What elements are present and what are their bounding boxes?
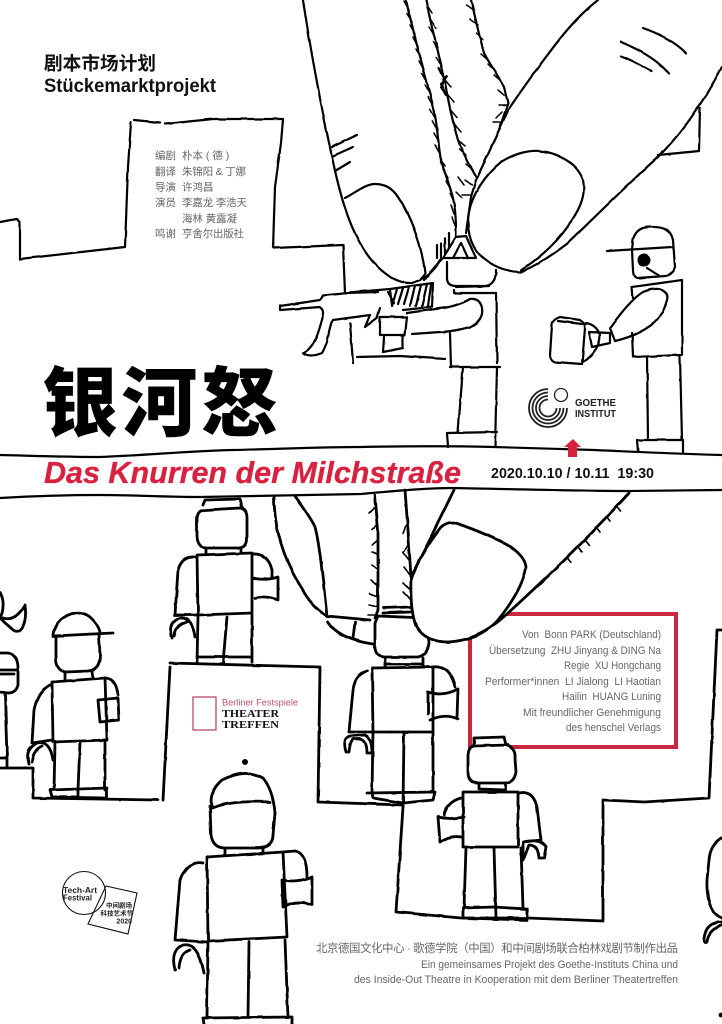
heading: programme name: Stückemarktprojekt [44,76,217,97]
centre figure [345,607,458,807]
credits in German: Von Bonn PARK (Deutschland) [522,629,661,641]
logo: Berliner Festspiele Theatertreffen: TREFFEN [222,720,280,731]
credits in Chinese: 导演 [155,180,176,194]
credits in Chinese: 朴本 ( 德 ) [182,149,229,162]
credits in Chinese: 亨舍尔出版社 [182,227,244,240]
top centre figure [171,499,278,663]
lower walls [0,663,403,805]
logo: Tech-Art Festival: 2020 [116,918,132,926]
upper wall outline [0,119,345,293]
credits in Chinese: 演员 [155,196,176,209]
credits in Chinese: 朱锦阳 & 丁娜 [182,165,246,178]
figure with mug and eye patch [550,227,683,452]
line drawing: lower scene [0,490,722,1024]
credits in German: Regie XU Hongchang [564,660,661,672]
lower right figure [438,737,546,920]
logo: Goethe Institut [529,388,616,427]
logo: Goethe Institut: INSTITUT [575,409,616,420]
figure with rifle [280,236,500,447]
lower left finger [274,490,411,644]
main title: 银河怒 [42,342,277,452]
credits in German: Hailin HUANG Luning [562,691,661,703]
logo: Berliner Festspiele Theatertreffen [193,697,298,731]
logo: Tech-Art Festival: 科技艺术节 [100,908,134,918]
date and time: 2020.10.10 / 10.11 19:30 [491,465,654,482]
logo: Goethe Institut: GOETHE [575,398,616,409]
band rules around the subtitle [0,446,722,457]
production note: 北京德国文化中心 · 歌德学院（中国）和中间剧场联合柏林戏剧节制作出品 [316,941,678,955]
logo: Tech-Art Festival: Tech-Art [63,886,97,895]
right giant finger with nail [462,0,722,272]
credits in Chinese: 许鸿昌 [182,180,214,194]
credits in Chinese: 翻译 [155,165,176,178]
credits in German: Übersetzung ZHU Jinyang & DING Na [489,645,662,657]
partial figure at left edge [0,593,26,767]
heading: programme name [44,49,217,97]
production note: Ein gemeinsames Projekt des Goethe-Instituts China und [421,959,678,971]
credits in German: Mit freundlicher Genehmigung [523,707,661,719]
left giant finger with nail [303,0,476,283]
logo: Berliner Festspiele Theatertreffen: Berliner Festspiele [222,698,298,708]
logo: Tech-Art Festival: Festival [63,894,92,902]
bottom large figure [174,760,312,1024]
partial figure at right edge [704,838,722,1016]
credits in Chinese: 海林 黄露凝 [182,212,238,225]
production note: des Inside-Out Theatre in Kooperation mit dem Berliner Theatertreffen [354,974,678,986]
lower right finger and nail [411,490,629,642]
credits in German [485,629,662,734]
credits in German: des henschel Verlags [566,722,661,734]
credits in German: Performer*innen LI Jialong LI Haotian [485,676,661,688]
credits in Chinese: 编剧 [155,149,176,162]
production note [316,941,678,986]
credits in Chinese: 李嘉龙 李浩天 [182,196,248,209]
heading: programme name: 剧本市场计划 [44,49,156,76]
credits in Chinese: 鸣谢 [155,227,176,240]
red subtitle: Das Knurren der Milchstraße [44,455,461,490]
left figure with cap [28,613,119,798]
icon: red arrow [564,439,581,457]
logo: Tech-Art Festival: 中间剧场 [106,900,132,910]
line drawing: upper scene [0,0,722,452]
credits in Chinese [155,149,248,240]
logo: Berliner Festspiele Theatertreffen: THEATER [222,709,280,720]
red credits box [470,614,676,747]
logo: Tech-Art Festival [62,872,137,934]
